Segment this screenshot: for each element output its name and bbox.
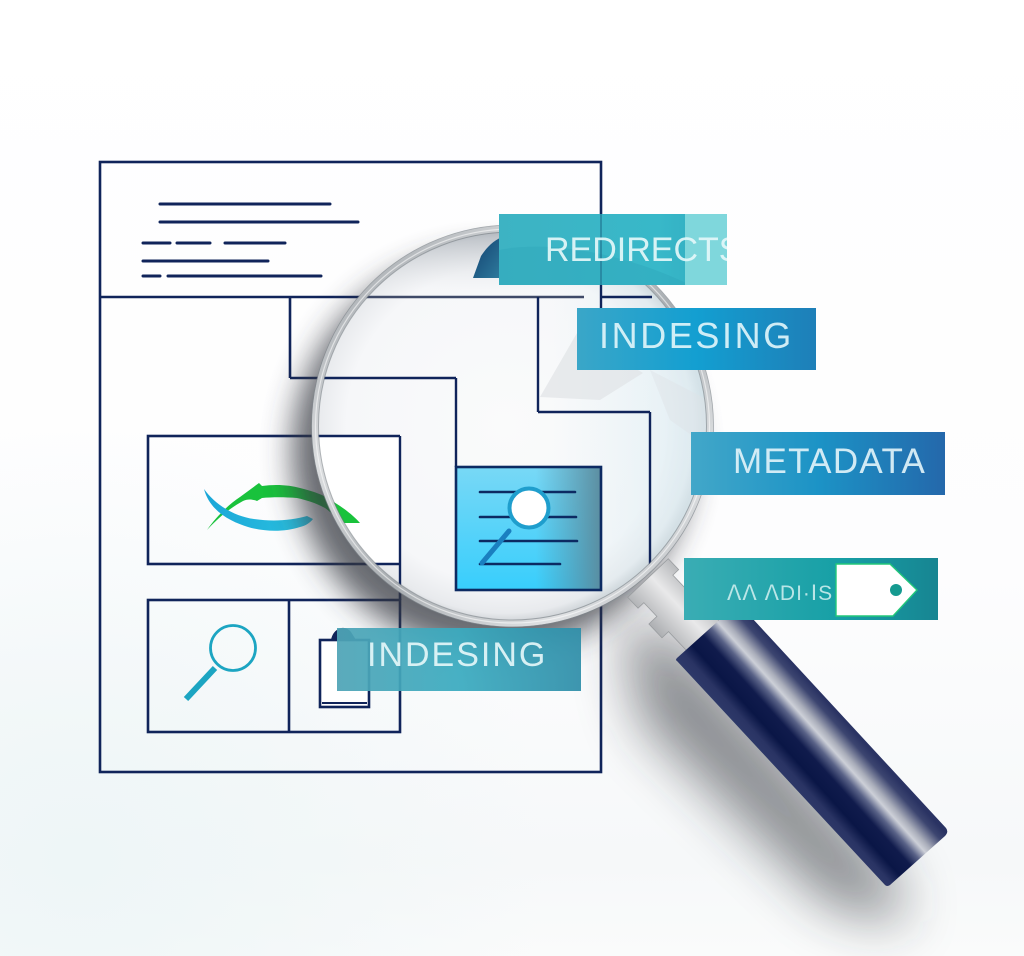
icon: clipboard document (320, 628, 369, 707)
handle collar (626, 557, 728, 660)
soft grey facet highlights (540, 334, 642, 400)
redirected wireframe lines (318, 285, 652, 586)
label: METADATA (691, 432, 945, 495)
lens contents (318, 232, 652, 586)
icon: teal magnifier (186, 626, 256, 699)
metal ring (315, 228, 710, 624)
panel: page wireframe (100, 162, 601, 772)
icon: small magnifier (482, 488, 548, 563)
dark reflection at lens top (473, 238, 499, 278)
icon: curved arrows (204, 483, 360, 531)
icon: magnifying glass (290, 225, 947, 886)
label: REDIRECTS: REDIRECTS (545, 231, 741, 269)
shadow: lens cast (292, 252, 692, 652)
text lines: page header (143, 204, 358, 276)
white box seen through glass (319, 437, 399, 563)
green arrow tip through lens (334, 502, 360, 523)
wireframe box: arrows panel (148, 436, 400, 564)
label: INDESING top (577, 308, 816, 370)
label: INDESING top: INDESING (599, 315, 794, 356)
panel: highlighted document (456, 467, 601, 590)
handle (676, 604, 947, 886)
label: REDIRECTS (499, 214, 741, 285)
lens glass (314, 228, 712, 626)
label: INDESING bottom (337, 628, 581, 691)
icon: price tag (836, 564, 917, 616)
shadow: handle cast (620, 610, 905, 925)
wireframe box: bottom panels (148, 600, 400, 732)
label: garbled tag: ꓥꓥ ꓥDI·ꓲS (727, 582, 833, 605)
text lines (480, 492, 577, 564)
label: METADATA: METADATA (733, 442, 926, 481)
grey reflection at top of lens (400, 232, 499, 274)
label: INDESING bottom: INDESING (367, 636, 547, 674)
label: garbled tag (684, 558, 938, 620)
